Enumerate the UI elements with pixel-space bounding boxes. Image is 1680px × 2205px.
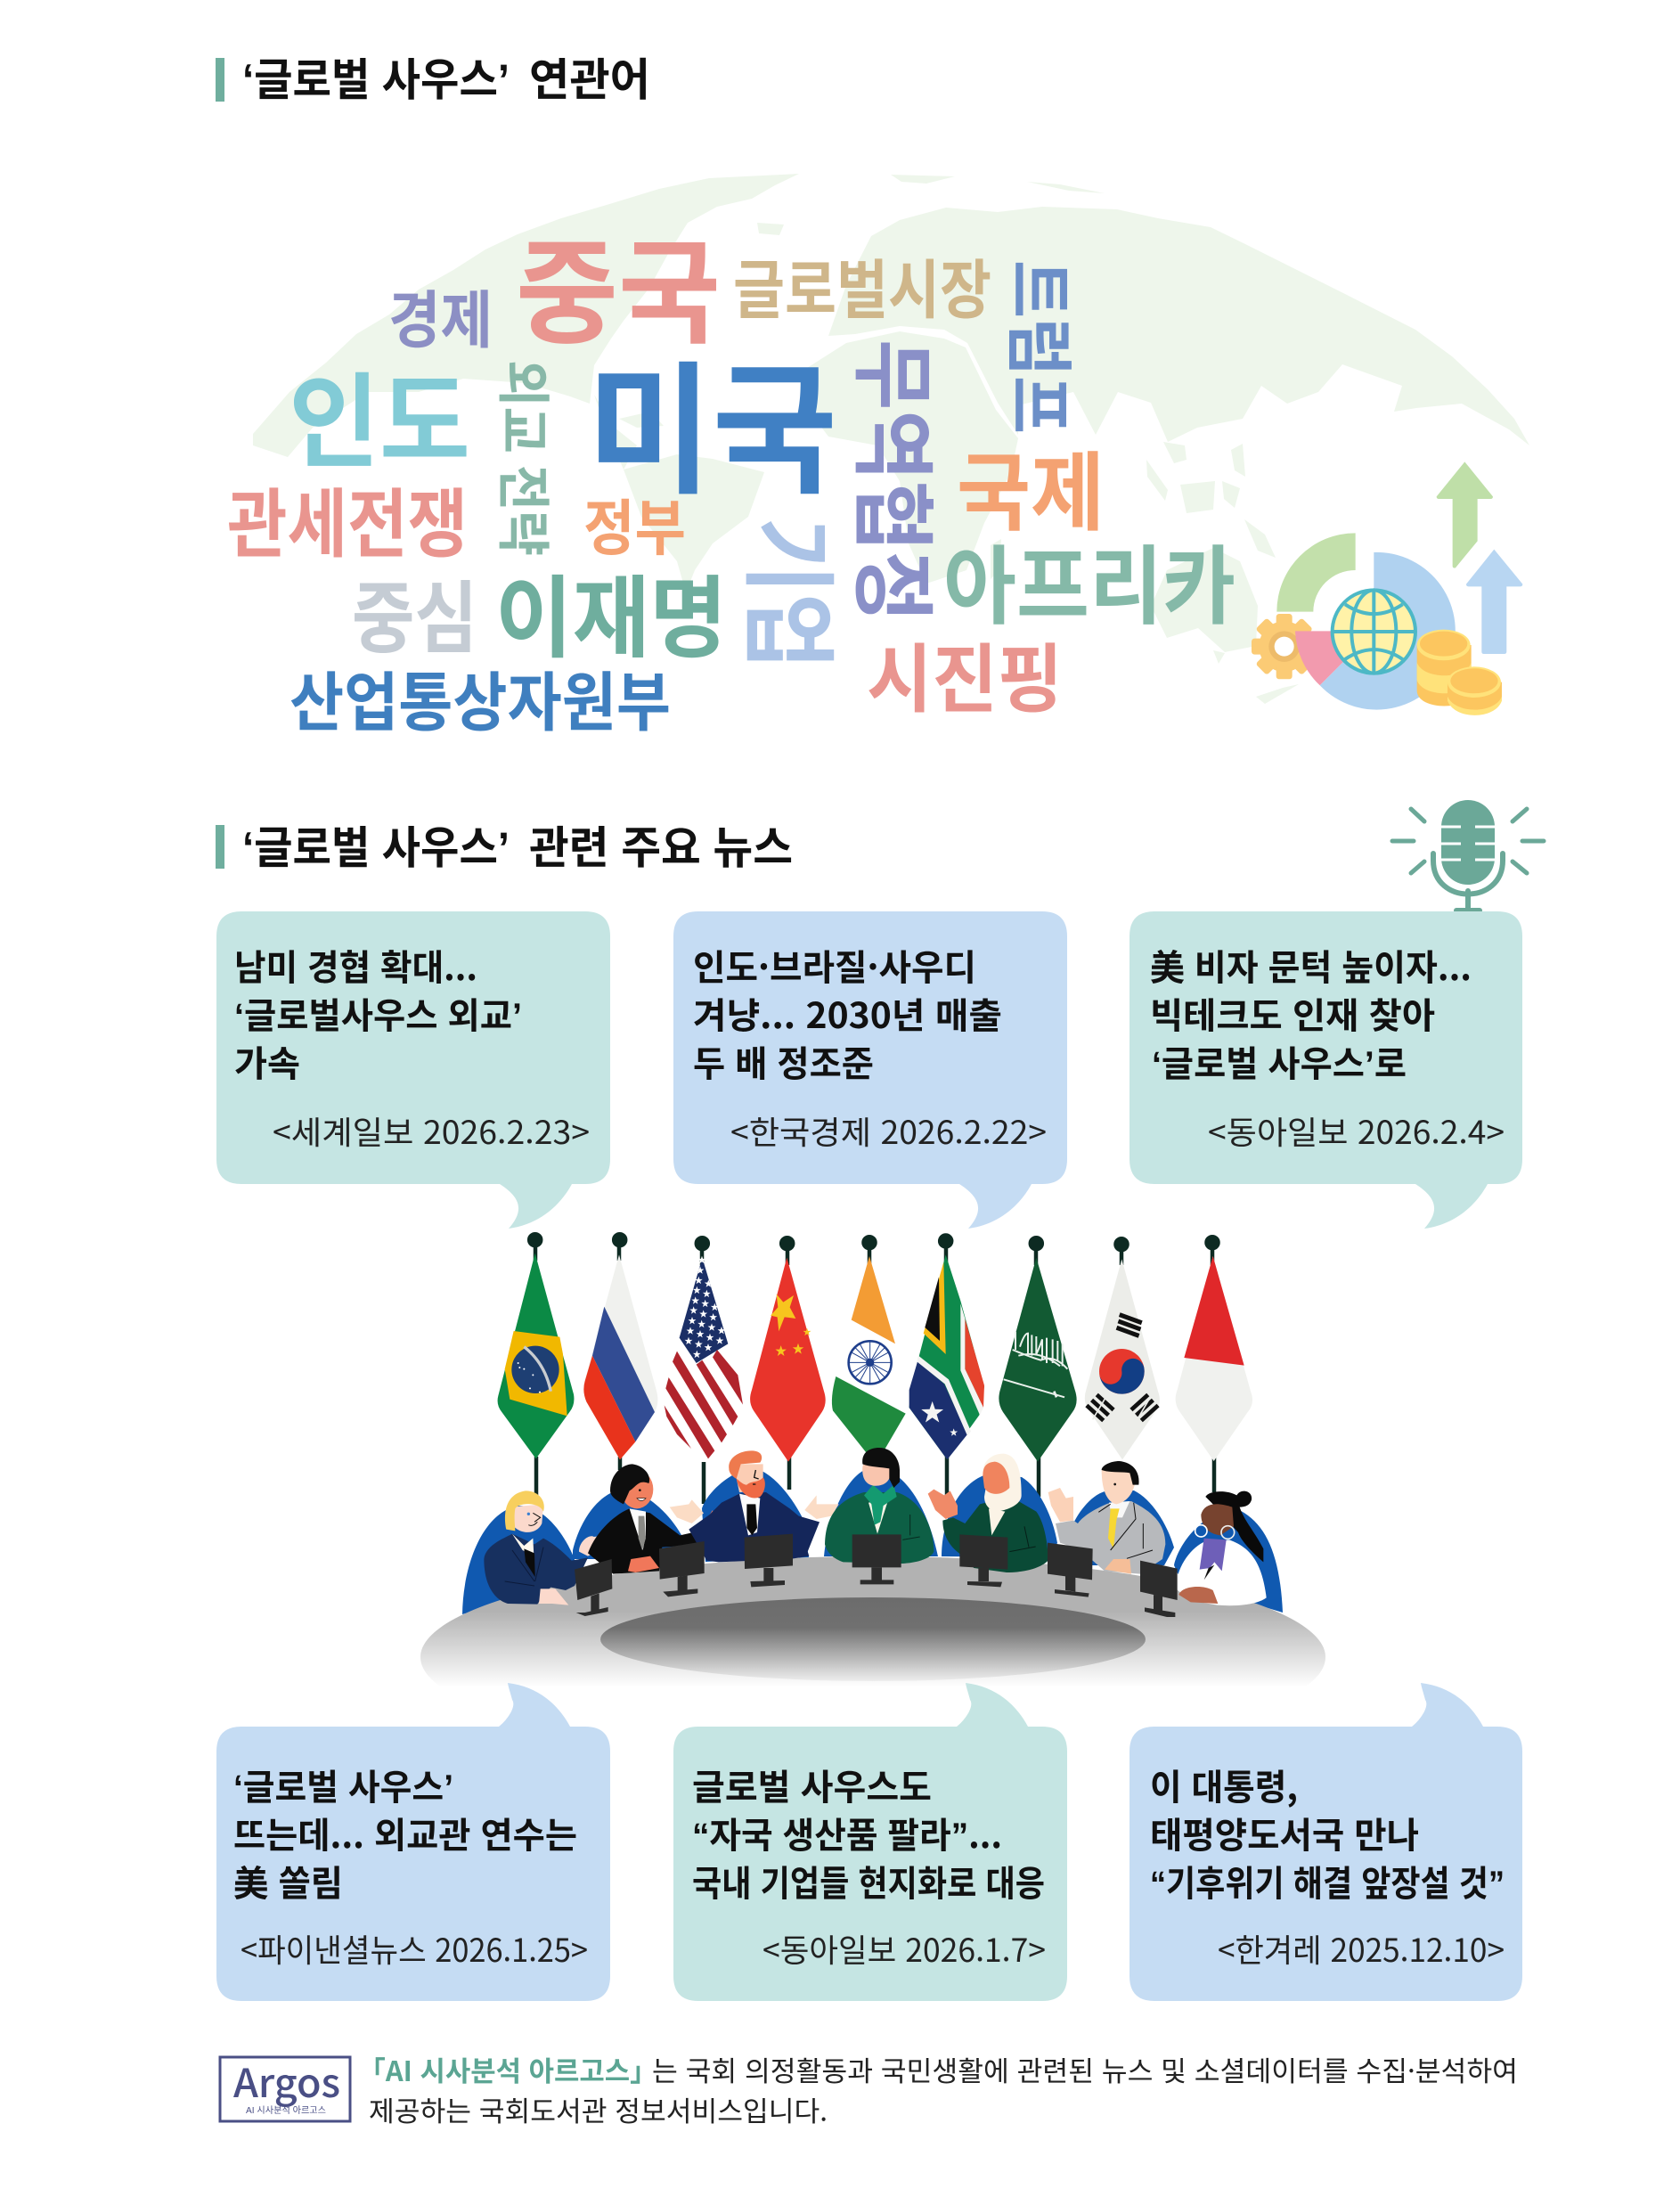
person 3: red-haired man in navy suit bbox=[689, 1450, 839, 1562]
word: 정부: 정부 bbox=[583, 479, 686, 568]
icon: green arc bbox=[1276, 533, 1356, 612]
icon: microphone bbox=[1392, 800, 1544, 911]
flags left group bbox=[498, 1254, 826, 1462]
word: 관세전쟁: 관세전쟁 bbox=[227, 465, 468, 573]
news bubble: 세계일보: 가속 bbox=[234, 1035, 300, 1087]
footer description: 는 국회 의정활동과 국민생활에 관련된 뉴스 및 소셜데이터를 수집·분석하여 bbox=[652, 2049, 1518, 2089]
word: 이재명: 이재명 bbox=[495, 546, 727, 675]
footer description: 「AI 시사분석 아르고스」 bbox=[358, 2049, 657, 2089]
news bubble: 한국경제: 인도·브라질·사우디 bbox=[693, 939, 976, 991]
word: 산업통상자원부: 산업통상자원부 bbox=[290, 650, 671, 744]
news bubble: 한국경제: <한국경제 2026.2.22> bbox=[730, 1107, 1047, 1154]
news bubble: 파이낸셜뉴스: ‘글로벌 사우스’ bbox=[233, 1759, 453, 1810]
heading: related words: ‘글로벌 사우스’ bbox=[242, 45, 510, 109]
icon: green up arrow bbox=[1437, 461, 1493, 568]
word: 중국: 중국 bbox=[516, 201, 721, 366]
flags right group bbox=[832, 1254, 1252, 1462]
word: 기업: 기업 bbox=[727, 518, 864, 669]
word: 시진핑: 시진핑 bbox=[867, 620, 1063, 728]
news bubble: 동아일보 2026.1.7: <동아일보 2026.1.7> bbox=[763, 1925, 1046, 1972]
footer description bbox=[358, 2049, 1518, 2129]
person 6: man in grey suit bbox=[1048, 1461, 1165, 1574]
chairs bbox=[462, 1467, 1283, 1614]
word: 경제: 경제 bbox=[388, 271, 493, 361]
news bubble: 한국경제: 두 배 정조준 bbox=[693, 1035, 874, 1087]
news bubble: 한겨레: “기후위기 해결 앞장설 것” bbox=[1150, 1855, 1505, 1907]
logo: Argos bbox=[220, 2052, 350, 2121]
news bubble: 한국경제 bbox=[673, 911, 1067, 1229]
icon: global growth chart with globe, coins and arrows bbox=[1252, 461, 1522, 715]
news bubble: 동아일보 2026.1.7: 국내 기업들 현지화로 대응 bbox=[692, 1855, 1045, 1907]
monitors 1 to 3 bbox=[575, 1534, 793, 1616]
news bubble: 파이낸셜뉴스: 美 쏠림 bbox=[233, 1855, 343, 1907]
news bubble: 동아일보 2026.2.4 bbox=[1130, 911, 1522, 1229]
word: 아프리카: 아프리카 bbox=[943, 518, 1236, 641]
people left group bbox=[484, 1450, 839, 1616]
round table bbox=[420, 1556, 1325, 1758]
flag: South Africa bbox=[909, 1254, 984, 1459]
world map background bbox=[253, 174, 1529, 704]
word: 트럼프: 트럼프 bbox=[995, 260, 1093, 434]
people right group bbox=[825, 1448, 1267, 1617]
news bubble: 동아일보 2026.2.4: 美 비자 문턱 높이자... bbox=[1150, 939, 1472, 991]
heading: related words: 연관어 bbox=[529, 45, 650, 109]
flag: South Korea bbox=[1085, 1259, 1160, 1459]
logo: Argos: AI 시사분석 아르고스 bbox=[246, 2105, 326, 2116]
word: 무역협정: 무역협정 bbox=[839, 339, 959, 622]
news bubble: 파이낸셜뉴스: 뜨는데... 외교관 연수는 bbox=[233, 1807, 577, 1858]
flag: China bbox=[750, 1258, 826, 1462]
news bubble: 한국경제: 겨냥... 2030년 매출 bbox=[693, 987, 1002, 1039]
word cloud bbox=[227, 201, 1236, 744]
news bubble: 동아일보 2026.2.4: <동아일보 2026.2.4> bbox=[1208, 1107, 1505, 1154]
news bubble: 동아일보 2026.2.4: 빅테크도 인재 찾아 bbox=[1150, 987, 1435, 1039]
word: 글로벌시장: 글로벌시장 bbox=[733, 238, 991, 331]
flag: Russia bbox=[583, 1254, 657, 1459]
flag: India bbox=[832, 1256, 906, 1458]
person 1: blonde woman in navy bbox=[484, 1490, 607, 1605]
flag: USA bbox=[665, 1256, 743, 1458]
heading: related news bbox=[216, 813, 793, 877]
news bubble: 세계일보: ‘글로벌사우스 외교’ bbox=[234, 987, 522, 1039]
word: 외교: 외교 bbox=[488, 360, 566, 453]
news bubble: 한겨레 bbox=[1130, 1683, 1522, 2001]
person 2: man in black suit bbox=[588, 1464, 737, 1574]
flag: Indonesia bbox=[1176, 1256, 1252, 1461]
footer description: 제공하는 국회도서관 정보서비스입니다. bbox=[369, 2089, 828, 2129]
person 5: woman with white hijab bbox=[928, 1454, 1048, 1572]
word: 인도: 인도 bbox=[289, 340, 470, 488]
news bubble: 세계일보: 남미 경협 확대... bbox=[234, 939, 477, 991]
news bubble: 파이낸셜뉴스: <파이낸셜뉴스 2026.1.25> bbox=[241, 1925, 588, 1972]
news bubble: 세계일보 bbox=[216, 911, 610, 1229]
flag: Brazil bbox=[498, 1254, 574, 1458]
heading: related news: ‘글로벌 사우스’ bbox=[242, 813, 510, 877]
icon: gear bbox=[1252, 614, 1317, 679]
person 4: woman in green jacket bbox=[825, 1448, 934, 1564]
news bubble: 세계일보: <세계일보 2026.2.23> bbox=[273, 1107, 590, 1154]
monitors 4 to 7 bbox=[852, 1534, 1178, 1617]
news bubble: 동아일보 2026.2.4: ‘글로벌 사우스’로 bbox=[1152, 1035, 1407, 1087]
person 7: woman with curly hair and white coat bbox=[1176, 1491, 1267, 1605]
news bubble: 파이낸셜뉴스 bbox=[216, 1683, 610, 2001]
word: 국제: 국제 bbox=[957, 424, 1105, 548]
illustration: world leaders at a round table with flags bbox=[420, 1234, 1325, 1758]
news bubble: 동아일보 2026.1.7 bbox=[673, 1683, 1067, 2001]
word: 미국: 미국 bbox=[587, 316, 837, 523]
icon: coins bbox=[1417, 630, 1502, 715]
news bubble: 한겨레: 태평양도서국 만나 bbox=[1150, 1807, 1419, 1858]
news bubble: 동아일보 2026.1.7: “자국 생산품 팔라”... bbox=[692, 1807, 1002, 1858]
heading: related news: 관련 주요 뉴스 bbox=[529, 813, 793, 877]
flag poles bbox=[529, 1234, 1219, 1506]
news bubble: 한겨레: <한겨레 2025.12.10> bbox=[1218, 1925, 1505, 1972]
logo: Argos: Argos bbox=[233, 2052, 340, 2109]
icon: pie slices bbox=[1295, 552, 1456, 710]
icon: blue up arrow bbox=[1466, 550, 1522, 654]
word: 중심: 중심 bbox=[352, 556, 477, 669]
heading: related words bbox=[216, 45, 650, 109]
icon: globe bbox=[1333, 590, 1415, 674]
flag: Saudi Arabia bbox=[999, 1258, 1077, 1462]
news bubble: 동아일보 2026.1.7: 글로벌 사우스도 bbox=[692, 1759, 932, 1810]
word: 전략: 전략 bbox=[488, 465, 566, 556]
news bubble: 한겨레: 이 대통령, bbox=[1150, 1759, 1298, 1810]
